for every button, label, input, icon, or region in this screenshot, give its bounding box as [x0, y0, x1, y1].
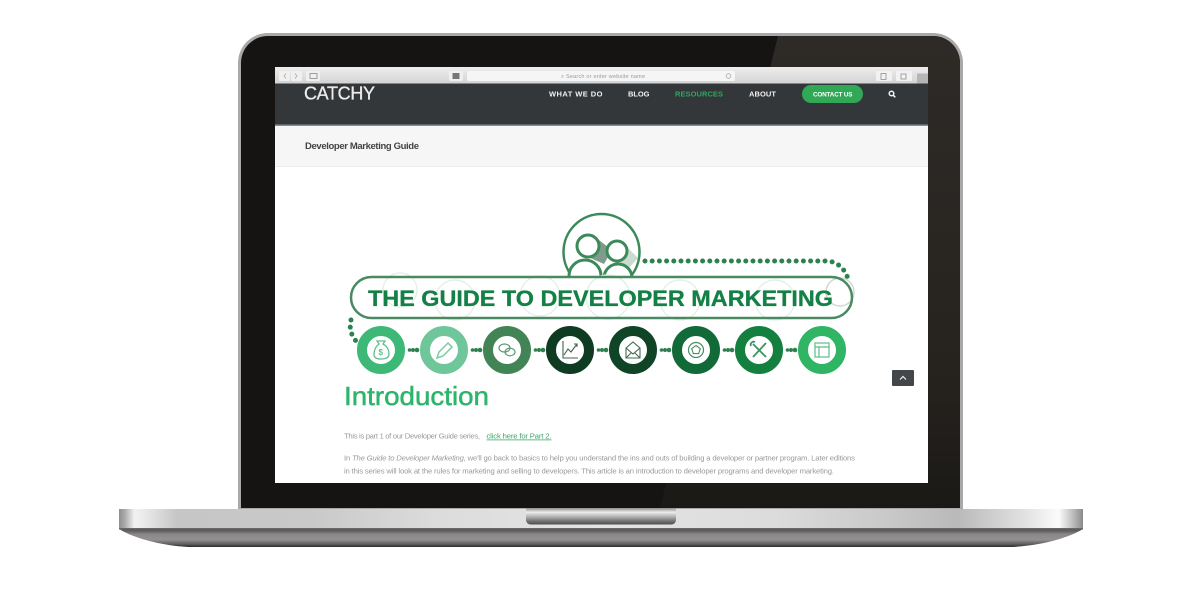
- nav links: WHAT WE DO: [549, 90, 603, 98]
- icon: pencil: [425, 331, 463, 369]
- logo: CATCHY: [304, 84, 375, 104]
- laptop base: [119, 508, 1083, 547]
- icon: tools: [740, 331, 778, 369]
- laptop mockup: [119, 33, 1083, 547]
- trackpad notch: [526, 508, 676, 524]
- icon: browser window: [803, 331, 841, 369]
- nav links: RESOURCES: [675, 90, 723, 98]
- page title bar: Developer Marketing Guide: [305, 141, 419, 152]
- icon: money bag: [362, 331, 400, 369]
- article text: click here for Part 2.: [486, 432, 552, 440]
- contact button: CONTACT US: [813, 91, 852, 98]
- dotted path: [350, 261, 848, 341]
- title pill: [351, 277, 852, 318]
- nav links: [549, 92, 776, 96]
- icon: badge: [677, 331, 715, 369]
- people emblem: [562, 212, 641, 276]
- icon: money bag: $: [378, 348, 384, 357]
- laptop lid: [238, 33, 963, 509]
- browser window: [275, 67, 928, 483]
- banner graphic: [350, 214, 854, 369]
- article text: This is part 1 of our Developer Guide series,: [344, 432, 480, 440]
- introduction heading: Introduction: [344, 381, 489, 411]
- icon: envelope: [614, 331, 652, 369]
- search icon: [889, 91, 895, 97]
- site navigation bar: [275, 84, 928, 126]
- article text: in this series will look at the rules for marketing and selling to developers. This article is an introduction to developer programs and developer marketing.: [344, 466, 834, 476]
- browser toolbar: [275, 67, 928, 84]
- nav links: ABOUT: [749, 90, 776, 98]
- connector dots: [408, 348, 797, 352]
- browser toolbar: ⌕ Search or enter website name: [561, 74, 645, 80]
- faint background icons: [383, 273, 854, 320]
- banner title: THE GUIDE TO DEVELOPER MARKETING: [368, 286, 833, 311]
- icon: line chart: [551, 331, 589, 369]
- article text: [344, 432, 855, 476]
- icon: speech bubbles: [488, 331, 526, 369]
- page title bar: [275, 126, 928, 167]
- nav links: BLOG: [628, 90, 650, 98]
- contact button: [802, 85, 863, 103]
- article text: In The Guide to Developer Marketing, we'll go back to basics to help you understand the ins and outs of building a developer or partner program. Later editions: [344, 454, 855, 462]
- back to top button: [892, 370, 914, 386]
